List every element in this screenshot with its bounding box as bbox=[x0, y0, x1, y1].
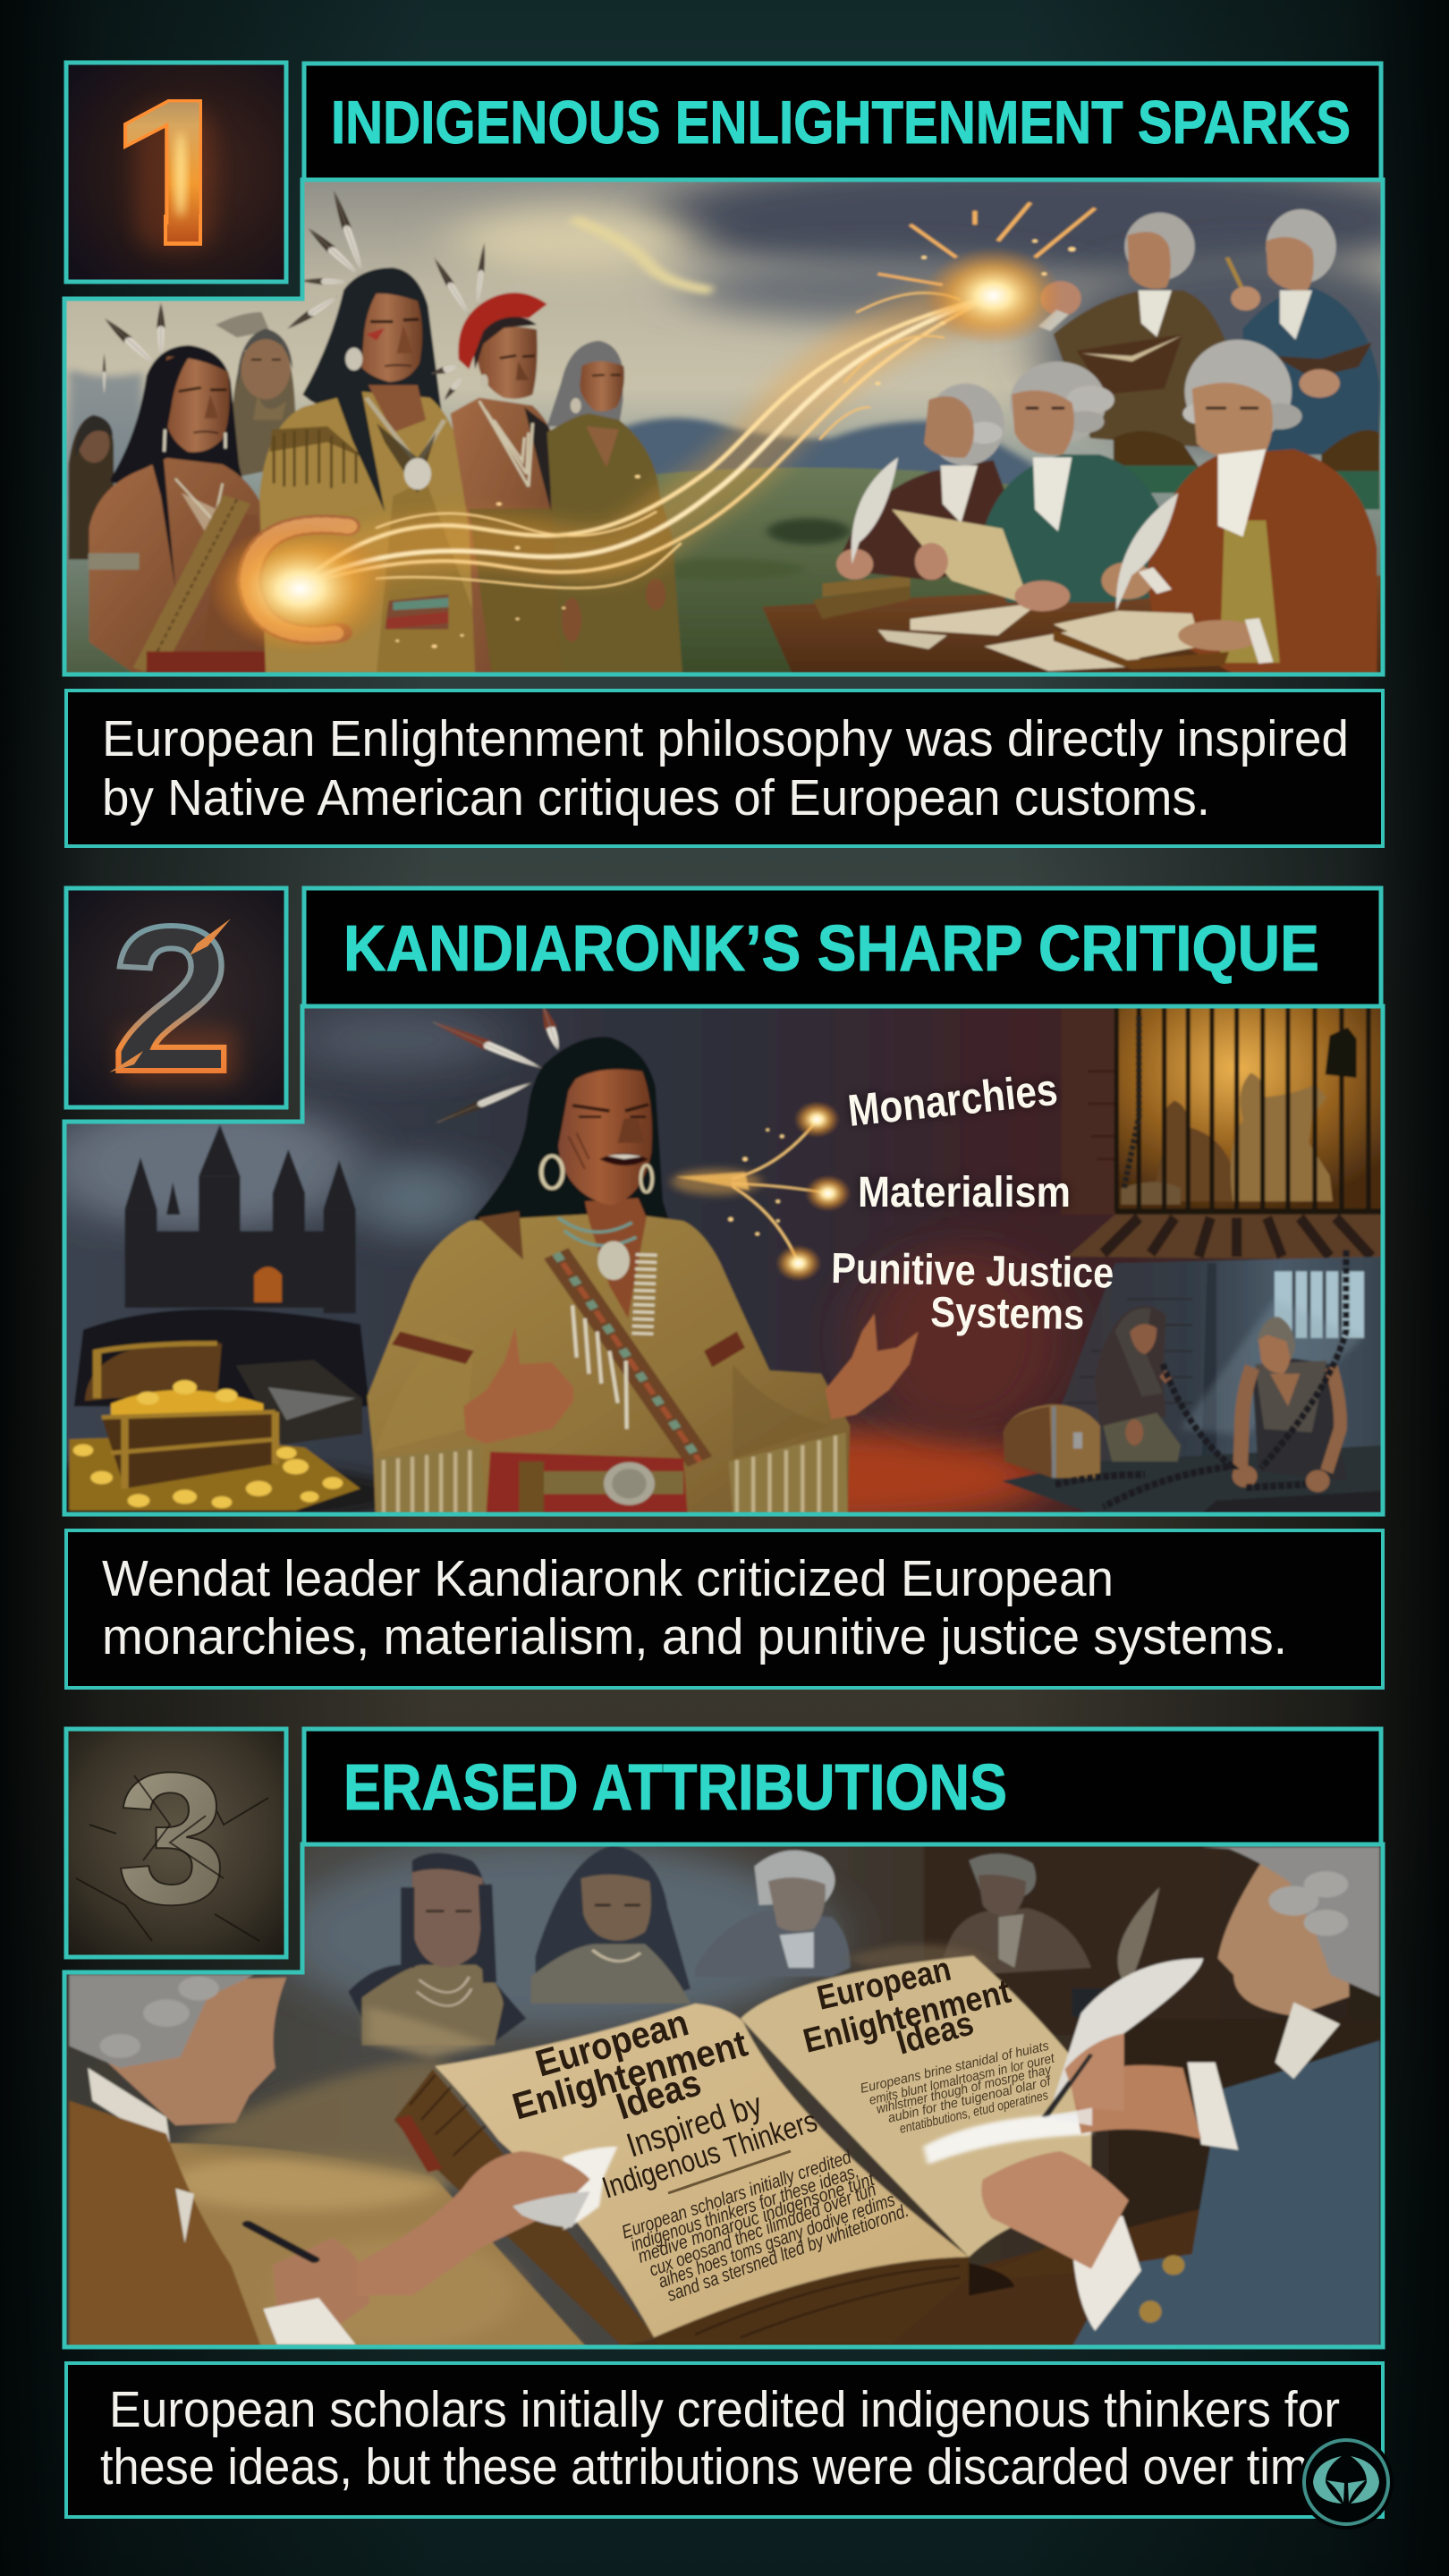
figure: background man with crest bbox=[216, 306, 299, 477]
caption box bbox=[66, 2363, 1383, 2517]
heading text: KANDIARONK’S SHARP CRITIQUE bbox=[343, 913, 1319, 985]
book body text right page: entatibbutions, etud operatines bbox=[898, 2088, 1050, 2137]
indigenous figures bbox=[69, 189, 682, 674]
figure: philosopher in rust coat bbox=[1054, 340, 1377, 676]
caption text: monarchies, materialism, and punitive justice systems. bbox=[102, 1608, 1287, 1665]
illustration frame bbox=[64, 180, 1383, 674]
caption text: European scholars initially credited indigenous thinkers for bbox=[109, 2381, 1340, 2438]
book body text left page: cux oeosand thec ilimuded over tun bbox=[647, 2179, 879, 2281]
figure: elder in olive coat bbox=[547, 341, 682, 674]
heading bar bbox=[304, 64, 1381, 180]
ghost: indigenous man 2 bbox=[530, 1845, 691, 2004]
illustration: Kandiaronk arguing against monarchies, materialism and punitive justice bbox=[0, 1001, 1395, 1527]
book title right page: Ideas bbox=[893, 2004, 978, 2063]
long hair bbox=[474, 1037, 694, 1370]
illustration frame bbox=[64, 1844, 1383, 2347]
book body text left page: aihes hoes toms gsany dodive redims bbox=[656, 2190, 898, 2292]
number badge 2 bbox=[66, 884, 286, 1115]
number badge 3 bbox=[66, 1729, 286, 1957]
label: Punitive Justice Systems: Systems bbox=[930, 1289, 1085, 1339]
feathers of man 1 bbox=[100, 302, 165, 394]
book body text right page: emits blunt lomalrtoasm in lor ouret bbox=[868, 2050, 1056, 2108]
book underline bbox=[668, 2151, 791, 2193]
numeral 2: 2 bbox=[111, 884, 233, 1115]
book title left page: Indigenous Thinkers bbox=[598, 2104, 821, 2206]
figure: standing philosopher with book bbox=[1040, 213, 1243, 449]
caption text: by Native American critiques of European customs. bbox=[102, 769, 1210, 826]
label: Monarchies: Monarchies bbox=[845, 1064, 1060, 1136]
label: Monarchies: Monarchies bbox=[845, 1064, 1060, 1136]
ghost: scholar 1 bbox=[695, 1851, 851, 1977]
caption text: these ideas, but these attributions were discarded over time. bbox=[100, 2438, 1348, 2496]
logo badge bbox=[1299, 2435, 1394, 2529]
book title left page: Inspired by bbox=[623, 2086, 767, 2165]
book body text left page: sand sa stersned lted by whitetiorond. bbox=[665, 2200, 911, 2306]
castle bbox=[74, 1124, 369, 1406]
book body text left page: medive monarouc indigensone tunt bbox=[635, 2169, 877, 2267]
quill feathers bbox=[852, 457, 1178, 611]
hands on the book bbox=[358, 2033, 1129, 2296]
caption box bbox=[66, 1530, 1383, 1688]
book body text right page: wihlstmer though of mosrpe thay bbox=[875, 2062, 1054, 2117]
heading text: ERASED ATTRIBUTIONS bbox=[343, 1752, 1007, 1824]
dungeon cell bbox=[1002, 1257, 1384, 1513]
book title left page bbox=[508, 2001, 821, 2206]
ghostly figures bbox=[348, 1845, 1091, 2057]
label: Materialism: Materialism bbox=[858, 1169, 1071, 1216]
treasure chests and gold bbox=[69, 1341, 362, 1511]
book title left page: Enlightenment bbox=[508, 2021, 751, 2128]
book title right page: European bbox=[814, 1951, 954, 2018]
numeral 1: 1 bbox=[108, 55, 248, 289]
chained prisoner bbox=[1233, 1317, 1348, 1492]
label: Materialism: Materialism bbox=[858, 1169, 1071, 1216]
hands bbox=[463, 1314, 919, 1444]
ghost: indigenous man 1 bbox=[348, 1853, 526, 2046]
panel 3: Erased Attributions bbox=[55, 1729, 1395, 2517]
book body text left page: indigenous thinkers for these ideas, bbox=[628, 2161, 861, 2256]
heading bar bbox=[304, 1729, 1381, 1844]
desk with books and papers bbox=[762, 575, 1386, 679]
label: Punitive Justice Systems: Punitive Justice bbox=[831, 1245, 1114, 1298]
feathers of man 2 bbox=[287, 191, 361, 329]
book body text right page: Europeans brine stanidal of huiats bbox=[859, 2038, 1051, 2097]
feathers bbox=[430, 1004, 564, 1126]
face bbox=[523, 1042, 652, 1206]
panel 1: Indigenous Enlightenment Sparks bbox=[55, 55, 1449, 846]
glowing stream of ideas bbox=[250, 292, 994, 634]
book title right page: Enlightenment bbox=[800, 1973, 1014, 2061]
figure: philosopher in green coat bbox=[892, 361, 1182, 611]
caption text: European Enlightenment philosophy was directly inspired bbox=[102, 710, 1349, 767]
book body text right page: aubin for the tuigenoal olar of bbox=[886, 2073, 1054, 2126]
book title left page: Ideas bbox=[611, 2061, 706, 2128]
kneeling prisoner bbox=[1094, 1306, 1181, 1462]
illustration frame bbox=[64, 1006, 1383, 1514]
figure: scholar on the right bbox=[1044, 1847, 1379, 2347]
figure: standing philosopher in blue bbox=[1227, 209, 1379, 454]
numeral 3: 3 bbox=[116, 1733, 227, 1944]
sand dunes bbox=[69, 2057, 591, 2352]
heading bar bbox=[304, 888, 1381, 1006]
caption text: Wendat leader Kandiaronk criticized European bbox=[102, 1550, 1114, 1607]
figure: philosopher in burgundy coat bbox=[836, 384, 1026, 580]
sparks from the mouth to each critique bbox=[671, 1101, 851, 1282]
figure: tall man in buckskin bbox=[259, 267, 496, 674]
figure: scholar on the left bbox=[69, 1975, 369, 2352]
prison scenes bbox=[1002, 1006, 1385, 1513]
chains bbox=[1055, 1250, 1346, 1507]
book body text left page: European scholars initially credited bbox=[619, 2147, 855, 2243]
book body text right page bbox=[859, 2038, 1056, 2137]
figure: man with bone necklace bbox=[89, 345, 274, 674]
figure: man with red crest bbox=[451, 292, 564, 674]
chairs bbox=[1114, 430, 1379, 510]
label: Punitive Justice Systems bbox=[831, 1245, 1114, 1339]
glow sources and sparks bbox=[208, 203, 1095, 655]
book body text left page bbox=[619, 2147, 911, 2306]
ghost: scholar 2 bbox=[937, 1853, 1091, 1977]
figure: Kandiaronk body bbox=[368, 1199, 850, 1513]
central figure bbox=[368, 1004, 919, 1513]
open book bbox=[394, 1956, 1091, 2346]
erase marks on pages bbox=[563, 2114, 1091, 2230]
prison cage bbox=[1062, 1006, 1385, 1260]
figure: far background man bbox=[69, 415, 114, 560]
feathers of man 3 bbox=[430, 242, 487, 402]
chest bbox=[1004, 1404, 1100, 1478]
ink bottle bbox=[1072, 1887, 1160, 2020]
illustration: indigenous leaders sending a spark of ideas to European philosophers bbox=[66, 182, 1381, 673]
panel 2: Kandiaronk's Sharp Critique bbox=[0, 884, 1395, 1688]
illustration: scholars erasing indigenous credit from a book bbox=[55, 1841, 1395, 2355]
caption box bbox=[66, 691, 1383, 846]
book title left page: European bbox=[531, 2001, 693, 2085]
number badge 1 bbox=[66, 55, 286, 289]
